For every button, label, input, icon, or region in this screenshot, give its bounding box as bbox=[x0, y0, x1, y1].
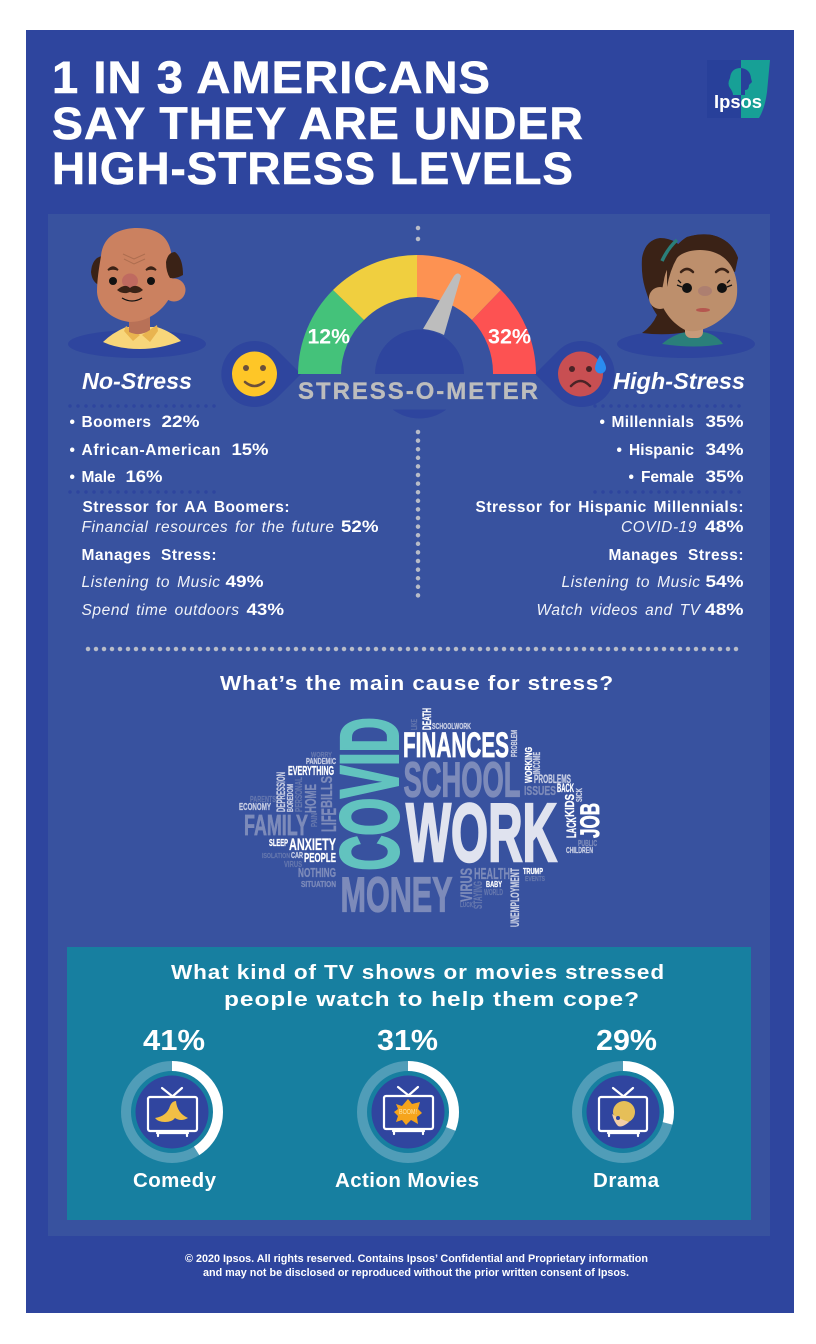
text block: no-stress stats: 22% bbox=[162, 413, 200, 431]
value: 41%: 41% bbox=[143, 1025, 205, 1057]
gauge segment: green bbox=[298, 290, 364, 374]
value 32%: 32% bbox=[488, 326, 531, 348]
donut: drama bbox=[577, 1066, 669, 1158]
footer copyright bbox=[185, 1253, 648, 1279]
gauge label: STRESS-O-METER bbox=[298, 378, 538, 405]
text block: high-stress stats: Manages Stress: bbox=[608, 547, 744, 564]
word cloud: STAYING bbox=[473, 881, 485, 909]
word cloud: COVID bbox=[324, 718, 416, 870]
word cloud: DEPRESSION bbox=[276, 772, 288, 812]
title: SAY THEY ARE UNDER bbox=[52, 98, 584, 149]
word cloud: MONEY bbox=[340, 868, 452, 922]
word cloud: WORRY bbox=[311, 752, 332, 759]
heading: TV shows question: What kind of TV shows or movies stressed bbox=[171, 962, 665, 984]
word cloud: VIRUS bbox=[457, 868, 476, 902]
icon: TV with skull bbox=[599, 1088, 647, 1136]
word cloud: INCOME bbox=[532, 752, 543, 774]
label: Action Movies: Action Movies bbox=[335, 1169, 479, 1192]
gauge hub bbox=[375, 330, 464, 418]
icon: sad face bubble bbox=[535, 341, 615, 407]
text block: no-stress stats bbox=[70, 413, 379, 619]
text block: high-stress stats: 54% bbox=[706, 573, 744, 591]
text block: no-stress stats: 43% bbox=[246, 601, 284, 619]
text block: no-stress stats: Listening to Music bbox=[82, 574, 220, 591]
word cloud: PERSONAL bbox=[294, 777, 305, 812]
heading: No-Stress: No-Stress bbox=[82, 368, 192, 394]
donut: action movies bbox=[362, 1066, 454, 1158]
text block: no-stress stats: African-American bbox=[82, 442, 220, 459]
gauge label band bbox=[301, 374, 534, 410]
text block: no-stress stats: Boomers bbox=[82, 414, 151, 431]
word cloud: PROBLEMS bbox=[534, 774, 571, 786]
word cloud: ISOLATION bbox=[262, 853, 290, 860]
word cloud: NOTHING bbox=[298, 865, 336, 880]
word cloud: UNEMPLOYMENT bbox=[510, 868, 522, 927]
label: Comedy: Comedy bbox=[133, 1169, 217, 1192]
text block: high-stress stats: Stressor for Hispanic Millennials: bbox=[476, 499, 744, 516]
word cloud: ANXIETY bbox=[289, 835, 336, 854]
text block: no-stress stats: • bbox=[70, 414, 75, 431]
word cloud: KIDS bbox=[562, 794, 577, 817]
word cloud: SCHOOLWORK bbox=[432, 721, 472, 731]
word cloud: BOREDOM bbox=[285, 784, 295, 812]
panel: TV shows bbox=[67, 947, 751, 1220]
word cloud: SICK bbox=[574, 787, 584, 802]
illustration: older man bbox=[68, 228, 206, 358]
word cloud: EVERYTHING bbox=[288, 763, 334, 778]
donut: comedy bbox=[126, 1066, 218, 1158]
word cloud: ISSUES bbox=[524, 783, 556, 798]
word cloud: TRUMP bbox=[523, 866, 543, 876]
word cloud: HEALTH bbox=[474, 866, 510, 883]
word cloud: FINANCES bbox=[403, 726, 509, 765]
icon: TV with banana peel bbox=[148, 1088, 197, 1136]
footer copyright: and may not be disclosed or reproduced without the prior written consent of Ipsos. bbox=[203, 1267, 629, 1279]
value 12%: 12% bbox=[308, 326, 350, 348]
word cloud: SITUATION bbox=[301, 879, 336, 889]
title: 1 IN 3 AMERICANS bbox=[52, 52, 491, 103]
word cloud: LACK bbox=[563, 817, 579, 838]
text block: high-stress stats: Millennials bbox=[612, 414, 694, 431]
heading: main cause for stress: What’s the main cause for stress? bbox=[220, 673, 614, 695]
title: HIGH-STRESS LEVELS bbox=[52, 143, 574, 194]
text block: high-stress stats: • bbox=[628, 469, 634, 486]
text block: high-stress stats bbox=[476, 413, 744, 619]
text block: high-stress stats: COVID-19 bbox=[621, 519, 697, 536]
text block: high-stress stats: 48% bbox=[705, 601, 744, 619]
text block: high-stress stats: Female bbox=[641, 469, 694, 486]
word cloud: LIFE bbox=[318, 808, 341, 832]
content panel bbox=[48, 214, 770, 1236]
gauge segment: orange bbox=[417, 255, 501, 320]
text block: no-stress stats: • bbox=[70, 442, 75, 459]
text block: no-stress stats: 15% bbox=[232, 441, 269, 459]
text block: high-stress stats: Watch videos and TV bbox=[536, 602, 702, 619]
word cloud: PANDEMIC bbox=[306, 756, 336, 766]
text block: high-stress stats: • bbox=[616, 442, 622, 459]
text block: high-stress stats: 35% bbox=[706, 468, 744, 486]
gauge needle bbox=[423, 274, 461, 335]
word cloud: PUBLIC bbox=[578, 838, 597, 848]
word cloud: BILLS bbox=[319, 776, 336, 808]
word cloud bbox=[239, 708, 605, 927]
title bbox=[52, 52, 584, 194]
text block: no-stress stats: Stressor for AA Boomers: bbox=[82, 499, 290, 516]
word cloud: PROBLEM bbox=[509, 730, 519, 757]
word cloud: CHILDREN bbox=[566, 845, 593, 855]
illustration: young woman bbox=[617, 234, 755, 358]
text block: no-stress stats: Male bbox=[82, 469, 116, 486]
word cloud: DEATH bbox=[422, 708, 434, 730]
value: 29%: 29% bbox=[596, 1025, 657, 1057]
text block: high-stress stats: 34% bbox=[706, 441, 744, 459]
word cloud: FAMILY bbox=[244, 810, 308, 842]
logo: Ipsos: Ipsos bbox=[714, 92, 762, 112]
word cloud: SCHOOL bbox=[404, 754, 520, 808]
text block: no-stress stats: • bbox=[70, 469, 75, 486]
word cloud: PARENTS bbox=[250, 794, 276, 804]
word cloud: SLEEP bbox=[269, 838, 288, 849]
text block: no-stress stats: Manages Stress: bbox=[82, 547, 216, 564]
word cloud: PEOPLE bbox=[304, 850, 336, 865]
text block: no-stress stats: Spend time outdoors bbox=[82, 602, 239, 619]
icon: smiley face bubble bbox=[221, 341, 301, 407]
text block: no-stress stats: 49% bbox=[226, 573, 264, 591]
word cloud: BABY bbox=[486, 879, 502, 889]
text block: no-stress stats: 52% bbox=[341, 518, 379, 536]
stress-o-meter gauge bbox=[298, 255, 538, 418]
heading: TV shows question bbox=[171, 962, 665, 1011]
word cloud: WORLD bbox=[484, 887, 503, 897]
footer copyright: © 2020 Ipsos. All rights reserved. Contains Ipsos’ Confidential and Proprietary information bbox=[185, 1253, 648, 1265]
heading: TV shows question: people watch to help them cope? bbox=[224, 989, 640, 1011]
text block: no-stress stats: Financial resources for the future bbox=[82, 519, 334, 536]
word cloud: WORK bbox=[406, 786, 557, 879]
text block: high-stress stats: Hispanic bbox=[629, 442, 694, 459]
value: 31%: 31% bbox=[377, 1025, 438, 1057]
word cloud: HOME bbox=[303, 784, 320, 813]
word cloud: BACK bbox=[557, 783, 574, 795]
word cloud: VIRUS bbox=[284, 859, 302, 869]
text block: no-stress stats: 16% bbox=[126, 468, 163, 486]
logo: Ipsos bbox=[707, 60, 770, 118]
word cloud: JOB bbox=[575, 803, 605, 838]
heading: High-Stress: High-Stress bbox=[613, 368, 745, 394]
gauge segment: red bbox=[472, 290, 536, 374]
word cloud: PAIN bbox=[309, 813, 319, 827]
text block: high-stress stats: • bbox=[600, 414, 605, 431]
word cloud: WORKING bbox=[524, 747, 535, 783]
label: Drama: Drama bbox=[593, 1169, 660, 1192]
vertical dotted divider bbox=[416, 228, 420, 604]
word cloud: LUCK bbox=[460, 902, 473, 909]
word cloud: LIKE bbox=[409, 719, 419, 730]
text block: high-stress stats: 35% bbox=[706, 413, 744, 431]
word cloud: CAR bbox=[291, 850, 303, 860]
word cloud: EVENTS bbox=[525, 876, 545, 883]
text block: high-stress stats: Listening to Music bbox=[562, 574, 700, 591]
text block: high-stress stats: 48% bbox=[705, 518, 744, 536]
word cloud: ECONOMY bbox=[239, 802, 271, 813]
gauge segment: yellow bbox=[333, 255, 417, 320]
icon: TV with boom: BOOM! bbox=[399, 1109, 417, 1116]
